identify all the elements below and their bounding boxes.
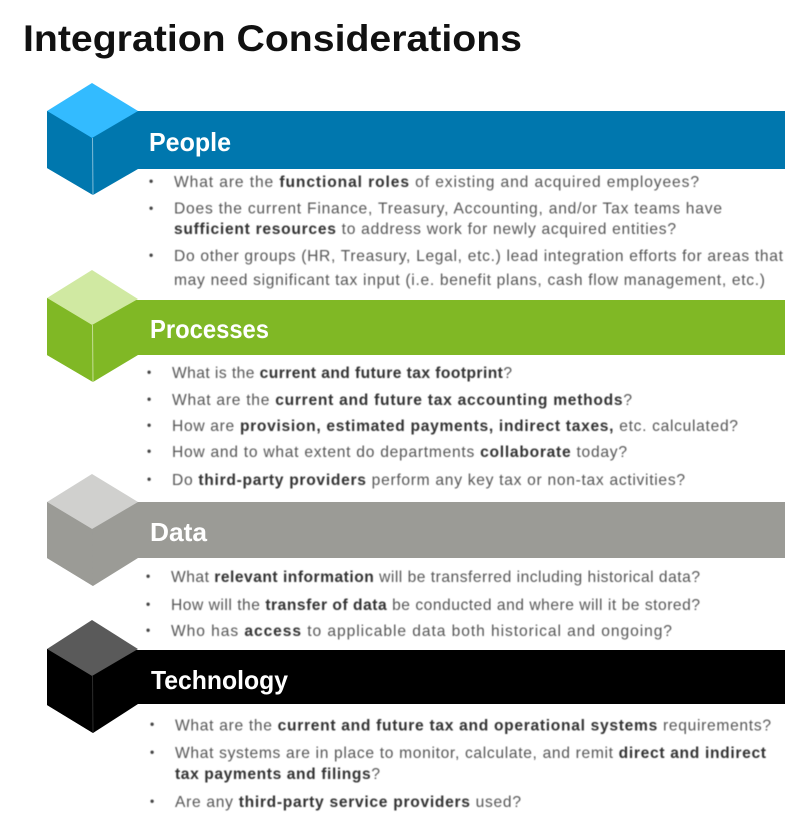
text block: data questions: • — [146, 597, 150, 611]
text block: data questions: • — [146, 569, 150, 583]
text block: processes questions: What are the current and future tax accounting methods? — [172, 392, 632, 409]
banner: people — [47, 111, 785, 195]
banner: processes — [47, 298, 785, 382]
text block: technology questions — [150, 717, 771, 811]
text block: technology questions: • — [150, 745, 154, 759]
banner: technology — [47, 649, 785, 733]
text block: people questions: • — [149, 174, 153, 188]
icon: people cube — [47, 83, 138, 195]
text block: processes questions: • — [147, 472, 151, 486]
text block: technology questions: What systems are in place to monitor, calculate, and remit direct and indirect — [175, 745, 766, 762]
panel: technology — [47, 620, 785, 811]
text block: data questions: How will the transfer of data be conducted and where will it be stored? — [171, 597, 700, 614]
panel: processes — [47, 270, 785, 489]
icon: data cube — [47, 474, 138, 586]
text block: people questions: may need significant tax input (i.e. benefit plans, cash flow management, etc.) — [174, 272, 765, 289]
icon: processes cube — [47, 270, 138, 382]
text block: technology questions: • — [150, 794, 154, 808]
text block: technology questions: What are the current and future tax and operational systems requirements? — [175, 718, 771, 734]
text block: processes questions: Do third-party providers perform any key tax or non-tax activities? — [172, 472, 685, 489]
text block: processes questions — [147, 365, 738, 489]
text block: data questions: What relevant information will be transferred including historical data? — [171, 569, 700, 586]
text block: processes questions: • — [147, 444, 151, 458]
text block: processes questions: What is the current and future tax footprint? — [172, 365, 512, 382]
text block: people questions — [149, 174, 784, 289]
text block: processes questions: How and to what extent do departments collaborate today? — [172, 444, 627, 461]
text block: data questions: Who has access to applicable data both historical and ongoing? — [171, 623, 672, 640]
heading: technology: Technology — [151, 665, 289, 695]
text block: people questions: Does the current Finance, Treasury, Accounting, and/or Tax teams have — [174, 200, 722, 218]
text block: processes questions: • — [147, 392, 151, 406]
panel: data — [47, 474, 785, 640]
text block: people questions: • — [149, 201, 153, 215]
text block: processes questions: How are provision, estimated payments, indirect taxes, etc. calculated? — [172, 418, 738, 435]
text block: processes questions: • — [147, 365, 151, 379]
icon: technology cube — [47, 620, 138, 733]
text block: technology questions: tax payments and filings? — [175, 766, 380, 783]
heading: data: Data — [150, 517, 208, 547]
title: Integration Considerations — [23, 18, 522, 59]
banner: data — [47, 502, 785, 586]
text block: people questions: sufficient resources to address work for newly acquired entities? — [174, 221, 676, 238]
text block: technology questions: Are any third-party service providers used? — [175, 794, 521, 811]
text block: people questions: What are the functional roles of existing and acquired employees? — [174, 174, 699, 191]
text block: people questions: • — [149, 248, 153, 262]
text block: data questions: • — [146, 623, 150, 637]
panel: people — [47, 83, 785, 289]
heading: people: People — [149, 127, 231, 157]
text block: processes questions: • — [147, 418, 151, 432]
text block: data questions — [146, 569, 700, 640]
heading: processes: Processes — [150, 314, 269, 344]
text block: technology questions: • — [150, 717, 154, 731]
text block: people questions: Do other groups (HR, Treasury, Legal, etc.) lead integration efforts for areas that — [174, 248, 784, 265]
